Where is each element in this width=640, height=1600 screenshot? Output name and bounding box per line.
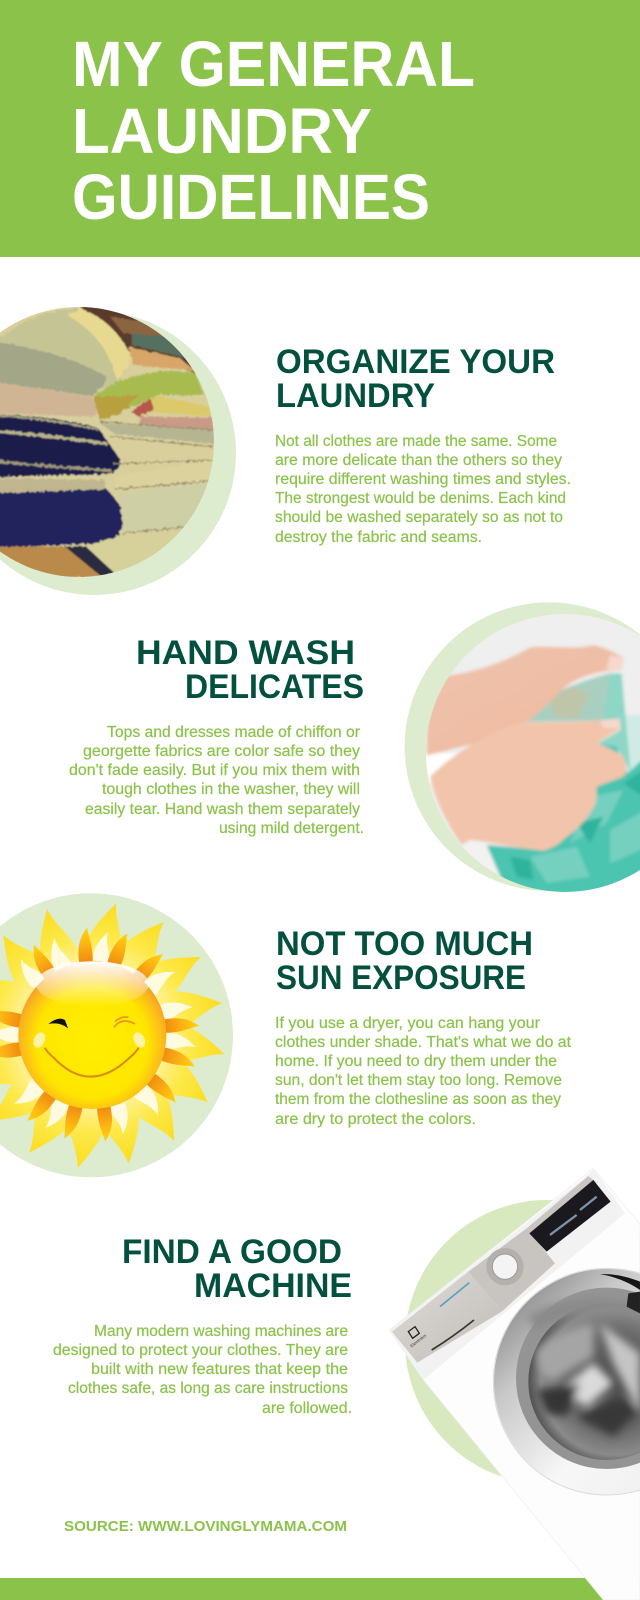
door xyxy=(493,1268,640,1495)
text: hand wash delicates: tough clothes in the washer, they will xyxy=(102,781,360,798)
heading: organize your laundry: LAUNDRY xyxy=(276,377,435,415)
text: find a good machine: designed to protect your clothes. They are xyxy=(53,1342,348,1359)
text: organize your laundry: The strongest would be denims. Each kind xyxy=(275,490,566,507)
heading: not too much sun exposure xyxy=(276,925,533,997)
heading: hand wash delicates: DELICATES xyxy=(185,668,364,706)
photo: washing machine over green circle xyxy=(389,1168,640,1600)
heading: organize your laundry xyxy=(276,343,555,415)
heading: not too much sun exposure: NOT TOO MUCH xyxy=(276,925,533,963)
control panel xyxy=(389,1168,625,1380)
text: find a good machine: Many modern washing machines are xyxy=(94,1323,348,1340)
text: not too much sun exposure: sun, don't let them stay too long. Remove xyxy=(275,1072,562,1089)
text: organize your laundry: are more delicate than the others so they xyxy=(275,452,562,469)
text: hand wash delicates xyxy=(69,724,364,837)
text: organize your laundry xyxy=(275,433,571,546)
text: organize your laundry: require different washing times and styles. xyxy=(275,471,571,488)
control panel: Electrolux xyxy=(409,1332,428,1348)
machine body xyxy=(389,1168,640,1600)
title: LAUNDRY xyxy=(72,95,372,167)
title: MY GENERAL xyxy=(72,28,475,100)
text: hand wash delicates: don't fade easily. But if you mix them with xyxy=(69,762,360,779)
title: GUIDELINES xyxy=(72,161,430,233)
photo: folded towels in circle xyxy=(0,303,236,595)
text: not too much sun exposure: clothes under shade. That's what we do at xyxy=(275,1034,572,1051)
text: organize your laundry: should be washed separately so as not to xyxy=(275,509,563,526)
icon: smiling sun in circle xyxy=(0,893,233,1177)
text: organize your laundry: destroy the fabric and seams. xyxy=(275,529,482,546)
text: find a good machine: clothes safe, as long as care instructions xyxy=(68,1380,348,1397)
source line: SOURCE: WWW.LOVINGLYMAMA.COM xyxy=(64,1518,347,1535)
text: organize your laundry: Not all clothes are made the same. Some xyxy=(275,433,557,450)
heading: find a good machine: MACHINE xyxy=(194,1267,352,1305)
photo: hands washing fabric in circle xyxy=(405,602,640,900)
heading: hand wash delicates xyxy=(136,634,364,706)
text: find a good machine: are followed. xyxy=(262,1400,352,1417)
header band xyxy=(0,0,640,257)
footer band xyxy=(0,1578,640,1600)
text: hand wash delicates: Tops and dresses made of chiffon or xyxy=(107,724,360,741)
heading: not too much sun exposure: SUN EXPOSURE xyxy=(276,959,526,997)
text: not too much sun exposure: home. If you need to dry them under the xyxy=(275,1053,557,1070)
text: find a good machine: built with new features that keep the xyxy=(91,1361,348,1378)
text: hand wash delicates: using mild detergent. xyxy=(219,820,364,837)
heading: find a good machine: FIND A GOOD xyxy=(122,1233,342,1271)
text: not too much sun exposure xyxy=(275,1015,572,1128)
heading: hand wash delicates: HAND WASH xyxy=(136,634,355,672)
title xyxy=(72,28,475,233)
heading: organize your laundry: ORGANIZE YOUR xyxy=(276,343,555,381)
heading: find a good machine xyxy=(122,1233,352,1305)
text: not too much sun exposure: If you use a dryer, you can hang your xyxy=(275,1015,540,1032)
text: hand wash delicates: easily tear. Hand wash them separately xyxy=(85,801,360,818)
text: not too much sun exposure: them from the clothesline as soon as they xyxy=(275,1091,561,1108)
text: find a good machine xyxy=(53,1323,352,1417)
text: hand wash delicates: georgette fabrics are color safe so they xyxy=(83,743,360,760)
text: not too much sun exposure: are dry to protect the colors. xyxy=(275,1111,476,1128)
